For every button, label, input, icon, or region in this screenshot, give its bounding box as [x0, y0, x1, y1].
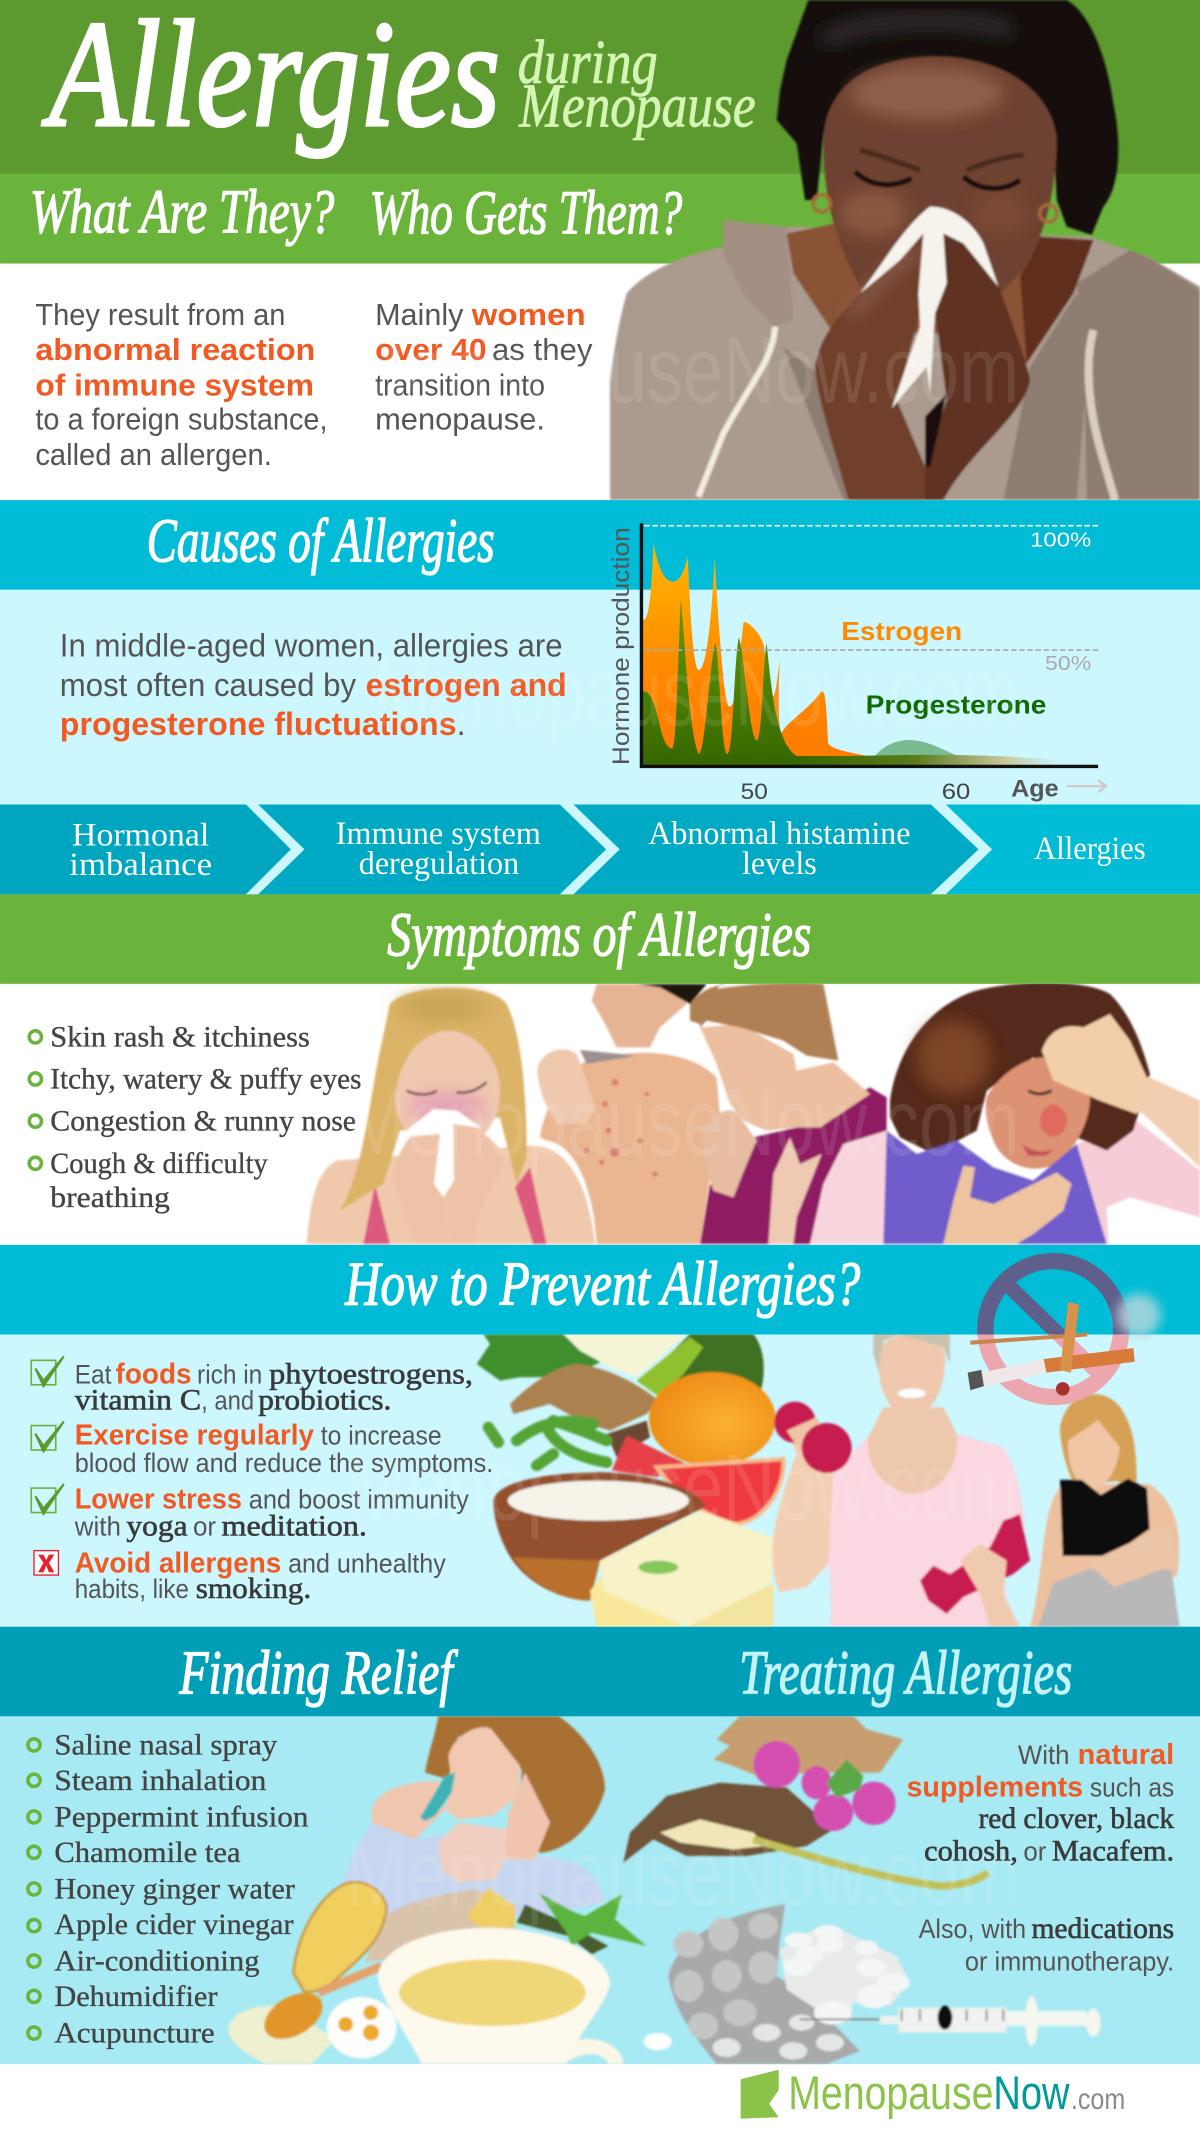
text block: medications: [919, 1912, 1174, 1977]
greens: [477, 1334, 603, 1381]
tip: foods: probiotics.: [258, 1383, 391, 1416]
lentils: [510, 1364, 658, 1431]
text block: natural supplements: natural: [1078, 1739, 1174, 1771]
text block: what are they: They result from an: [35, 298, 285, 332]
heading: prevent: How to Prevent Allergies?: [344, 1249, 860, 1319]
tip: allergens: smoking.: [196, 1572, 311, 1605]
tip: foods: vitamin C: [75, 1383, 201, 1416]
list: symptoms: Congestion & runny nose: [50, 1105, 356, 1138]
honey dipper on plate: [228, 1966, 382, 2064]
step: immune system deregulation: [258, 805, 606, 894]
icon: red cross: [34, 1551, 58, 1575]
label: progesterone: Progesterone: [866, 691, 1046, 719]
text block: medications: or immunotherapy.: [965, 1946, 1174, 1977]
text block: natural supplements: cohosh,: [924, 1834, 1018, 1867]
bowl: [493, 1472, 705, 1601]
list: symptoms: Skin rash & itchiness: [50, 1020, 310, 1053]
photo: sneezing woman with tissue: [610, 0, 1200, 500]
text block: who gets them: over 40: [375, 333, 487, 367]
tip: exercise: to increase: [321, 1420, 442, 1451]
chart: hormone production by age: [608, 523, 1106, 804]
tip: stress: yoga: [126, 1510, 188, 1543]
heading: finding relief: Finding Relief: [179, 1637, 458, 1707]
tip: foods: phytoestrogens,: [269, 1357, 473, 1390]
arrow: age: [1067, 780, 1106, 792]
list: finding relief: Acupuncture: [54, 2017, 215, 2050]
herbal tablets: [713, 1716, 903, 1774]
age ticks: Age: [1011, 775, 1059, 802]
list: finding relief: Peppermint infusion: [54, 1800, 309, 1833]
list: finding relief: Air-conditioning: [54, 1945, 260, 1978]
axes: [641, 523, 1098, 766]
step: hormonal imbalance: imbalance: [69, 847, 212, 883]
foods: [477, 1331, 1030, 1627]
text block: what are they: abnormal reaction: [35, 333, 315, 367]
tip: allergens: habits, like: [75, 1573, 189, 1604]
text block: who gets them: women: [470, 298, 586, 332]
text block: natural supplements: With: [1018, 1739, 1070, 1770]
tip: stress: Lower stress: [75, 1483, 242, 1515]
icon: no smoking sign: [968, 1261, 1161, 1397]
flax: [607, 1421, 650, 1457]
list: finding relief: Dehumidifier: [54, 1980, 217, 2013]
step: hormonal imbalance: [0, 805, 291, 894]
icon: checkmark: [31, 1356, 64, 1386]
text block: who gets them: Mainly: [375, 298, 464, 332]
text block: what are they: called an allergen.: [35, 438, 272, 472]
woman with rash on back: [537, 984, 720, 1244]
icon: checkmark: [31, 1421, 64, 1451]
text block: natural supplements: or: [1023, 1835, 1046, 1866]
text block: causes: estrogen and: [366, 666, 567, 703]
text block: natural supplements: [906, 1739, 1174, 1867]
y axis label: Hormone production: [608, 527, 635, 765]
tip: exercise: Exercise regularly: [75, 1420, 314, 1452]
heading: who gets them: Who Gets Them?: [370, 178, 682, 248]
tip: foods: Eat: [75, 1358, 112, 1389]
list: finding relief: Chamomile tea: [54, 1836, 241, 1869]
list: symptoms: Itchy, watery & puffy eyes: [50, 1063, 361, 1096]
text block: natural supplements: red clover, black: [978, 1802, 1174, 1835]
step: immune system deregulation: deregulation: [359, 846, 519, 882]
text block: who gets them: as they: [492, 333, 593, 367]
list: symptoms: breathing: [50, 1181, 170, 1214]
woman coughing: [690, 983, 887, 1244]
tip: allergens: [75, 1547, 446, 1605]
tip: foods: rich in: [197, 1358, 262, 1389]
text block: what are they: to a foreign substance,: [35, 402, 328, 436]
subtitle: during: [518, 27, 658, 97]
tip: foods: [75, 1357, 473, 1416]
text block: what are they: of immune system: [35, 368, 314, 402]
text block: medications: Also, with: [919, 1913, 1026, 1944]
ginger: [293, 1882, 515, 1993]
age ticks: [741, 775, 1059, 804]
subtitle: Menopause: [518, 70, 756, 140]
woman: [338, 1716, 605, 1916]
list: prevention tips: [31, 1356, 493, 1605]
photo: woman with nasal spray and remedies: [228, 1716, 1101, 2064]
logo: MenopauseNow.com: [741, 2067, 1125, 2120]
woman with headache and scarf: [883, 983, 1200, 1244]
tofu: [590, 1511, 773, 1627]
tip: foods: foods: [116, 1358, 192, 1390]
tip: exercise: [75, 1420, 493, 1478]
tip: stress: [74, 1483, 469, 1543]
text block: who gets them: menopause.: [375, 402, 545, 436]
label: 50%: 50%: [1045, 653, 1091, 675]
list: finding relief: [28, 1728, 309, 2050]
grapefruit: [612, 1436, 783, 1524]
subtitle: [518, 27, 756, 140]
tip: foods: , and: [201, 1384, 254, 1415]
syringe: [800, 1996, 1101, 2046]
label: 100%: 100%: [1030, 529, 1091, 551]
tea cup: [378, 1928, 623, 2064]
watermarks: [347, 317, 1019, 1926]
heading: treating allergies: Treating Allergies: [739, 1637, 1072, 1707]
pea pods: [488, 1421, 607, 1466]
list: finding relief: Steam inhalation: [54, 1764, 266, 1797]
label: estrogen: Estrogen: [841, 618, 962, 646]
heading: causes: Causes of Allergies: [147, 505, 495, 575]
tip: allergens: and unhealthy: [288, 1547, 446, 1578]
chart areas: [643, 543, 1058, 766]
heading: symptoms: Symptoms of Allergies: [387, 899, 811, 969]
text block: medications: medications: [1031, 1912, 1174, 1945]
tip: exercise: blood flow and reduce the symptoms.: [75, 1447, 493, 1478]
woman with dumbbells: [772, 1331, 1030, 1627]
text block: causes: progesterone fluctuations: [60, 705, 457, 742]
herbs and mint: [517, 1893, 647, 1954]
flow: hormonal imbalance to allergies: [0, 805, 1146, 894]
chamomile: [327, 1997, 397, 2058]
text block: who gets them: transition into: [375, 368, 545, 402]
pills: [780, 1925, 910, 2025]
list: finding relief: Saline nasal spray: [54, 1728, 277, 1761]
tip: stress: and boost immunity: [249, 1483, 469, 1514]
step: immune system deregulation: Immune system: [336, 816, 541, 852]
step: hormonal imbalance: Hormonal: [72, 817, 209, 853]
text block: what are they: [35, 298, 328, 472]
photo: four women with symptoms: [307, 983, 1200, 1244]
icon: checkmark: [31, 1484, 64, 1514]
tip: stress: with: [74, 1511, 121, 1542]
logo: MenopauseNow.com: .com: [1071, 2083, 1125, 2116]
list: finding relief: Apple cider vinegar: [54, 1908, 294, 1941]
text block: natural supplements: Macafem.: [1052, 1834, 1174, 1867]
text block: natural supplements: supplements: [906, 1772, 1083, 1804]
clover flowers: [753, 1741, 896, 1831]
list: finding relief: Honey ginger water: [54, 1872, 295, 1905]
tip: allergens: Avoid allergens: [75, 1547, 281, 1579]
age ticks: 60: [942, 779, 970, 804]
text block: causes: .: [457, 705, 466, 742]
step: abnormal histamine levels: levels: [742, 846, 817, 882]
tip: stress: or: [193, 1511, 216, 1542]
sprouts: [563, 1334, 687, 1377]
roots and stalk: [623, 1783, 988, 1886]
list: symptoms: Cough & difficulty: [50, 1147, 268, 1180]
woman in black top: [1030, 1394, 1180, 1627]
text block: who gets them: [375, 298, 593, 436]
logo: MenopauseNow.com: Now: [993, 2067, 1070, 2120]
text block: causes: In middle-aged women, allergies are: [60, 626, 563, 663]
heading: what are they: What Are They?: [30, 176, 334, 246]
step: abnormal histamine levels: Abnormal histamine: [648, 816, 911, 852]
logo: MenopauseNow.com: Menopause: [788, 2067, 993, 2120]
step: allergies: Allergies: [1034, 831, 1146, 867]
text block: causes: [60, 626, 567, 742]
text block: causes: most often caused by: [60, 666, 357, 703]
icon: leaf face: [741, 2070, 779, 2119]
orange: [649, 1372, 776, 1466]
tip: stress: meditation.: [222, 1510, 367, 1543]
list: symptoms: [29, 1020, 361, 1214]
step: abnormal histamine levels: [573, 805, 978, 894]
broccoli: [637, 1334, 764, 1397]
blister pack: [668, 1904, 860, 2064]
woman sneezing: [307, 988, 595, 1244]
age ticks: 50: [741, 779, 768, 804]
photo: healthy foods and exercising women: [477, 1331, 1180, 1627]
text block: natural supplements: such as: [1090, 1772, 1174, 1803]
